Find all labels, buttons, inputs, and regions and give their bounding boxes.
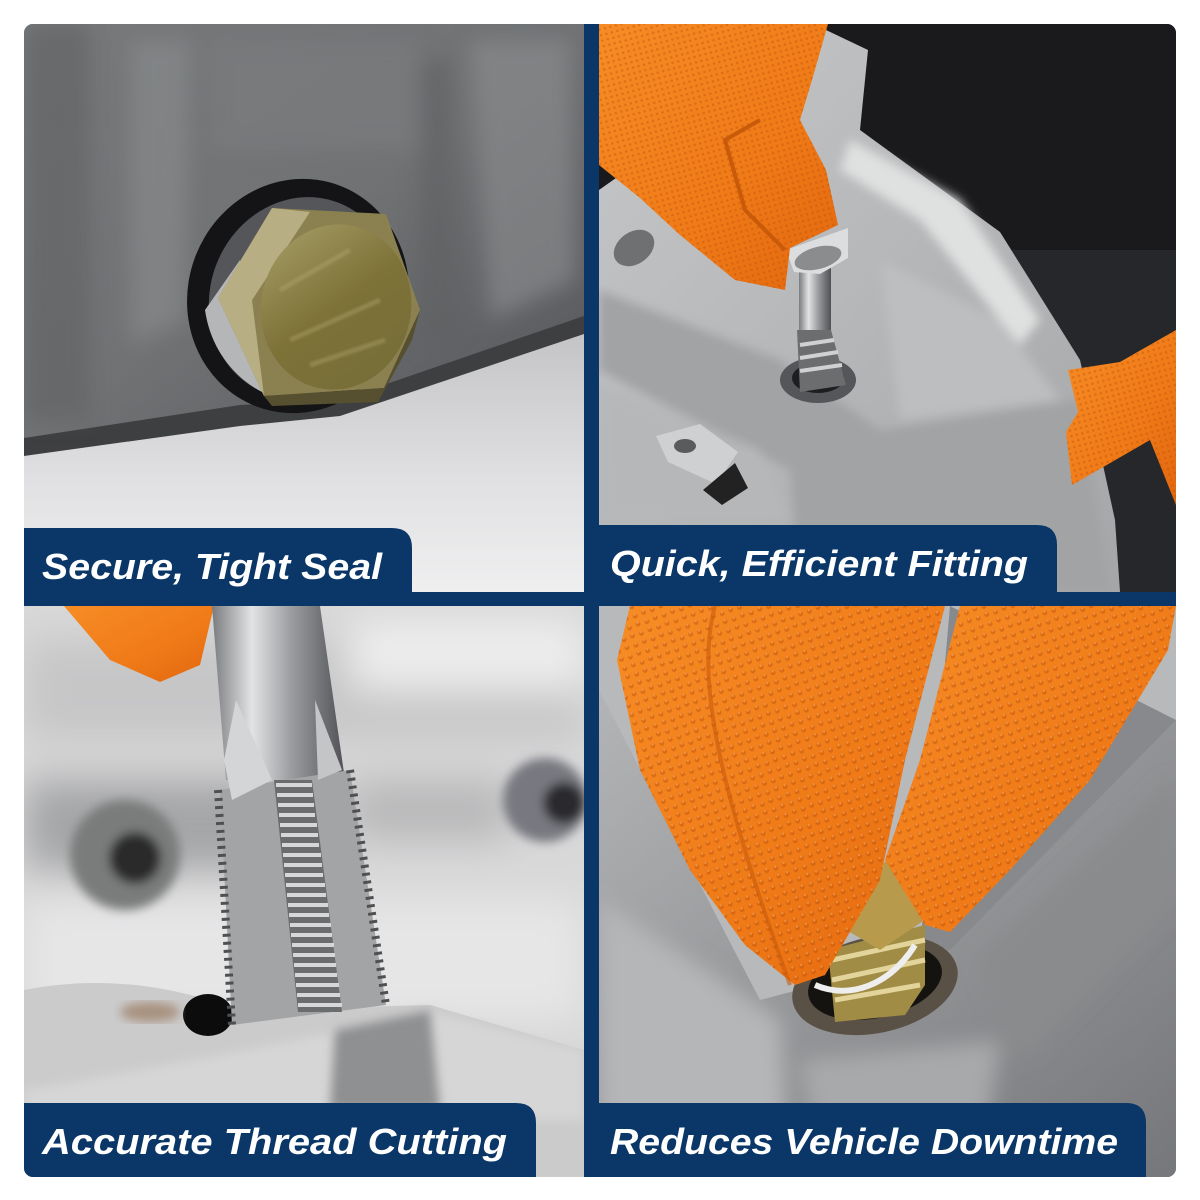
panel: thread cutting photo bbox=[24, 606, 587, 1177]
caption: Accurate Thread Cutting bbox=[24, 1103, 536, 1177]
surface bbox=[24, 983, 584, 1177]
panel: reduces downtime photo bbox=[599, 606, 1176, 1177]
oil pan bbox=[599, 30, 1120, 592]
caption: Quick, Efficient Fitting: Quick, Efficient Fitting bbox=[610, 543, 1028, 584]
panel: quick fitting photo bbox=[599, 24, 1176, 592]
caption: Secure, Tight Seal bbox=[24, 528, 412, 592]
second glove bbox=[1066, 330, 1176, 505]
caption: Reduces Vehicle Downtime: Reduces Vehicle Downtime bbox=[610, 1121, 1118, 1162]
gasket ring bbox=[187, 178, 408, 414]
gloved fingers bbox=[617, 606, 1176, 985]
drain hole bbox=[792, 939, 958, 1036]
mounting hole bbox=[656, 424, 738, 484]
caption: Accurate Thread Cutting: Accurate Thread Cutting bbox=[41, 1121, 507, 1162]
side bolt bbox=[614, 230, 654, 266]
caption: Reduces Vehicle Downtime bbox=[599, 1103, 1146, 1177]
icon: brass bolt bbox=[814, 862, 926, 1022]
caption: Secure, Tight Seal: Secure, Tight Seal bbox=[42, 546, 383, 587]
panel: secure seal photo bbox=[24, 24, 584, 592]
icon: tap tool bbox=[786, 228, 848, 392]
icon: tap tool bbox=[212, 606, 386, 1025]
glove fragment bbox=[64, 606, 214, 682]
icon: hex bolt bbox=[218, 208, 427, 406]
screw hole bbox=[780, 357, 856, 403]
gloved hand bbox=[599, 24, 838, 290]
caption: Quick, Efficient Fitting bbox=[599, 525, 1057, 592]
